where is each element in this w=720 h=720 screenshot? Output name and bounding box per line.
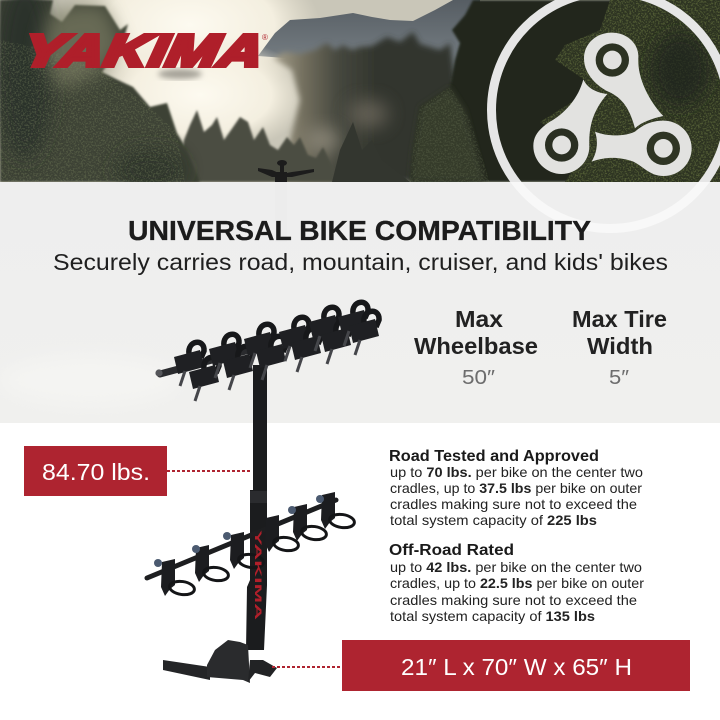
registered mark: ® bbox=[262, 33, 268, 42]
upper bar bbox=[160, 345, 268, 374]
text block: off-road rated: up to 42 lbs. per bike on the center two bbox=[390, 559, 642, 575]
sky bbox=[0, 0, 610, 182]
mountains bbox=[258, 0, 480, 80]
text block: road tested: cradles, up to 37.5 lbs per bike on outer bbox=[390, 480, 642, 496]
wheelbase value: 50″ bbox=[462, 367, 495, 389]
spec: max tire width bbox=[572, 306, 667, 389]
left tree leaves bbox=[0, 40, 185, 182]
bike handlebars bbox=[258, 160, 314, 182]
hazy top foliage bbox=[40, 5, 122, 90]
text block: road tested: Road Tested and Approved bbox=[389, 448, 599, 465]
icon: chain link badge bbox=[492, 0, 720, 228]
mast collar bbox=[250, 491, 267, 503]
spec: max wheelbase bbox=[414, 306, 538, 389]
badge ring over panel bbox=[510, 182, 710, 233]
spec: max wheelbase: Max bbox=[455, 306, 503, 332]
spec: max tire width: Max Tire bbox=[572, 306, 667, 332]
left trees bbox=[0, 0, 200, 182]
text block: road tested: cradles making sure not to exceed the bbox=[390, 496, 637, 512]
panel: compatibility background bbox=[0, 182, 720, 423]
mast bbox=[246, 365, 267, 650]
ghost of photo: mast shadow bbox=[275, 182, 287, 242]
callout: dimensions: 21″ L x 70″ W x 65″ H bbox=[401, 654, 632, 680]
subtitle: Securely carries road, mountain, cruiser, and kids' bikes bbox=[53, 249, 668, 275]
text block: road tested: up to 70 lbs. per bike on the center two bbox=[390, 464, 643, 480]
lower left leaves of right tree bbox=[410, 87, 490, 182]
cradle knobs bbox=[154, 495, 324, 567]
title: UNIVERSAL BIKE COMPATIBILITY bbox=[128, 215, 591, 246]
lower cradles bbox=[161, 492, 355, 596]
lower bar bbox=[147, 500, 336, 578]
text block: road tested bbox=[389, 448, 643, 528]
right tree leaves bbox=[540, 0, 720, 182]
cloud behind logo bbox=[158, 69, 202, 79]
weight leader line bbox=[167, 470, 252, 472]
text block: off-road rated: cradles, up to 22.5 lbs per bike on outer bbox=[390, 575, 644, 591]
mist glow bbox=[112, 48, 298, 142]
upper cradles bbox=[174, 302, 379, 401]
bar end cap bbox=[155, 369, 163, 377]
right tree shadow bbox=[650, 32, 710, 108]
left dark shade bbox=[0, 0, 53, 160]
distant forest bbox=[273, 32, 470, 182]
dimensions leader line bbox=[272, 666, 342, 668]
right tree lower-left foliage bbox=[410, 87, 485, 182]
text block: road tested: total system capacity of 225 lbs bbox=[390, 512, 597, 528]
text block: off-road rated: cradles making sure not to exceed the bbox=[390, 592, 637, 608]
right trees bbox=[409, 0, 610, 182]
wordmark: YAKIMA bbox=[18, 23, 269, 79]
tire width value: 5″ bbox=[609, 367, 629, 389]
badge ring over photo bbox=[487, 0, 720, 182]
callout: weight: 84.70 lbs. bbox=[42, 459, 150, 485]
fog patch low bbox=[304, 128, 340, 152]
bottom centre conifers bbox=[178, 110, 336, 182]
fog patch right bbox=[348, 100, 388, 128]
chain links bbox=[533, 33, 692, 176]
forest cone bbox=[332, 122, 410, 182]
sun glow bbox=[80, 0, 309, 74]
shaded base of left trees bbox=[107, 148, 188, 182]
hitch tube bbox=[163, 660, 210, 680]
callout: weight bbox=[24, 446, 252, 496]
pivot housing bbox=[207, 640, 250, 683]
text block: off-road rated: total system capacity of 135 lbs bbox=[390, 608, 595, 624]
spec: max tire width: Width bbox=[587, 333, 653, 359]
logo: Yakima wordmark bbox=[29, 33, 268, 81]
callout: dimensions bbox=[272, 640, 690, 691]
photo: misty forest banner bbox=[0, 0, 720, 192]
spec: max wheelbase: Wheelbase bbox=[414, 333, 538, 359]
foot bracket bbox=[248, 660, 277, 682]
ghost of photo: cloud highlight bbox=[0, 355, 180, 405]
text block: off-road rated bbox=[389, 542, 644, 624]
red brand on mast: YAKIMA bbox=[253, 530, 263, 621]
right lit tree bbox=[540, 0, 720, 182]
text block: off-road rated: Off-Road Rated bbox=[389, 542, 514, 559]
bike rack product bbox=[147, 302, 379, 683]
